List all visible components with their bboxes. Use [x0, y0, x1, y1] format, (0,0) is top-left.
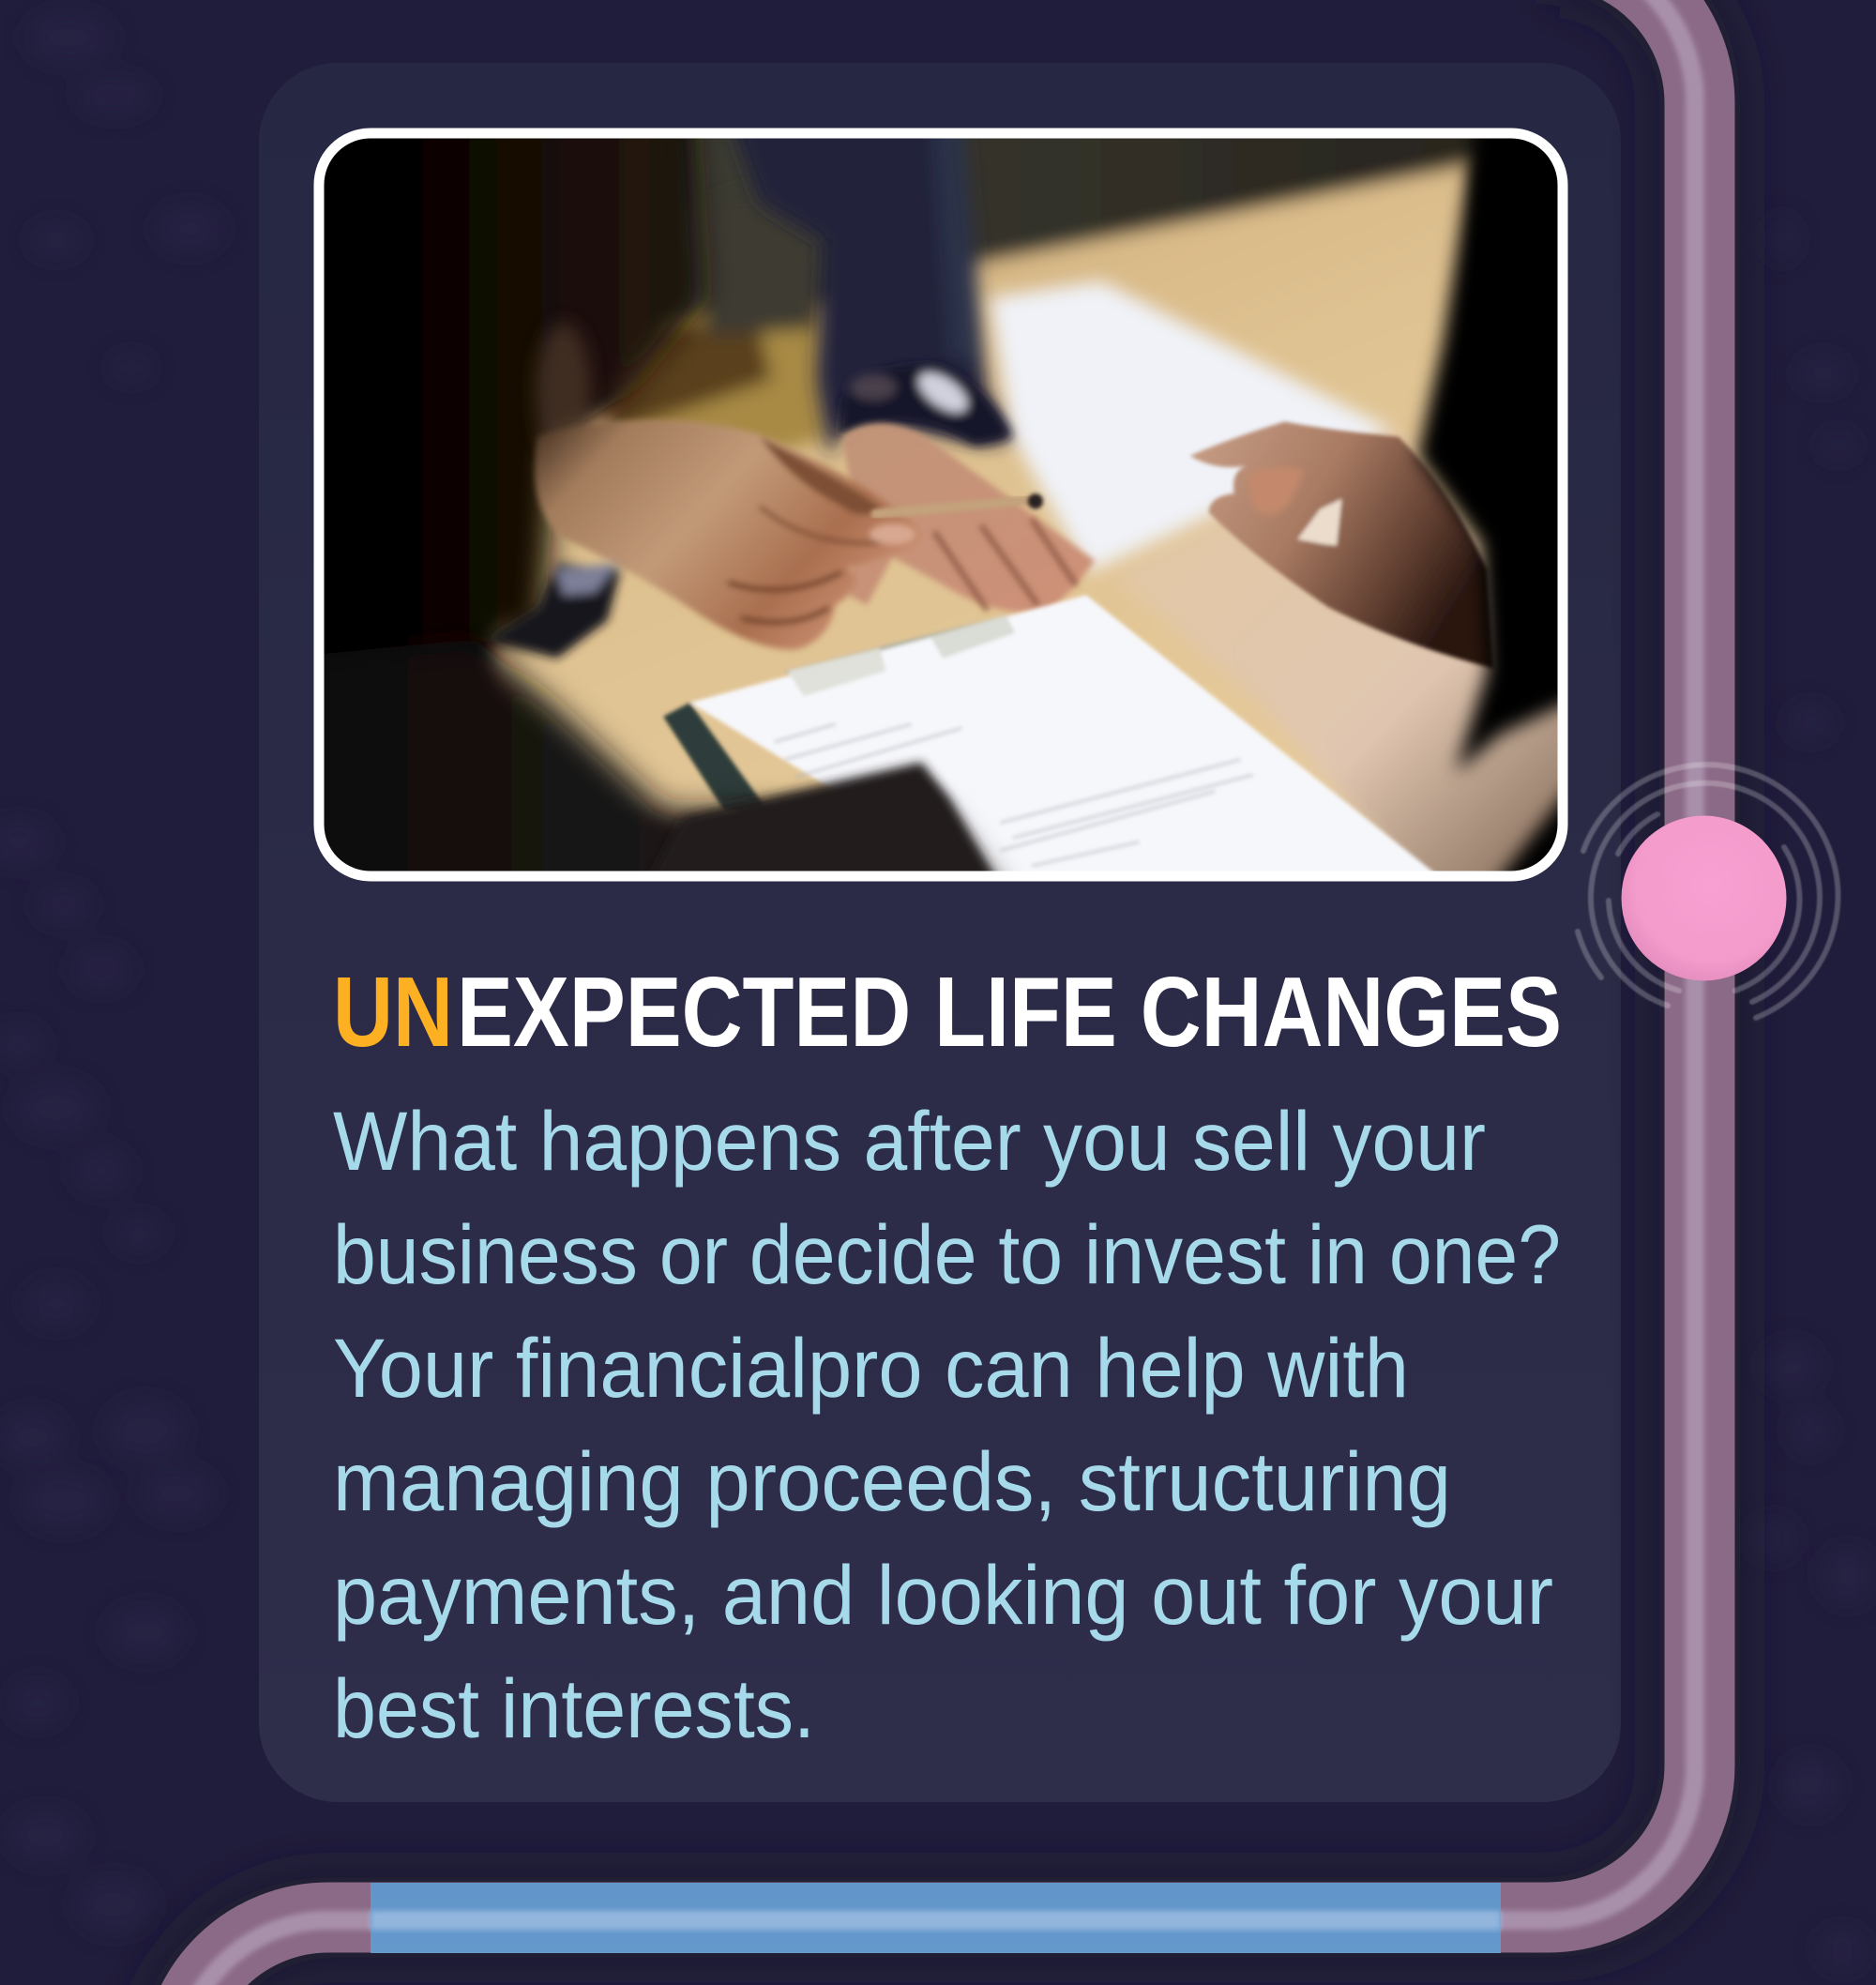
heading: unexpected life changes: EXPECTED LIFE CHANGES — [457, 957, 1562, 1068]
back hand — [841, 424, 1095, 613]
dark shoulder peak — [645, 762, 1000, 886]
sleeve — [728, 114, 1019, 459]
body text: business or decide to invest in one? — [333, 1207, 1561, 1301]
right dark figure — [1417, 114, 1595, 772]
cuff — [488, 564, 620, 659]
heading: unexpected life changes: UN — [333, 957, 453, 1068]
back paper — [990, 281, 1392, 572]
right hand — [1190, 421, 1493, 669]
watch — [838, 364, 1013, 446]
front left hand — [535, 420, 920, 649]
body text: best interests. — [333, 1661, 815, 1755]
photo: hands over documents on a table — [325, 139, 1557, 871]
paper text lines — [775, 724, 1253, 866]
photo frame — [319, 133, 1563, 876]
timeline marker ball — [1621, 816, 1786, 981]
front paper with clipboard — [663, 595, 1443, 880]
panel: content card — [259, 63, 1621, 1802]
body text: managing proceeds, structuring — [333, 1434, 1451, 1528]
timeline marker rings — [1578, 765, 1838, 1018]
head dark blurred — [422, 139, 717, 662]
bottom-right fade — [1493, 772, 1582, 899]
body text — [333, 1094, 1561, 1755]
body text: What happens after you sell your — [333, 1094, 1486, 1188]
pen — [876, 493, 1043, 514]
dark shoulder soft — [279, 639, 1013, 912]
timeline blue segment — [371, 1883, 1501, 1953]
body text: payments, and looking out for your — [333, 1548, 1553, 1642]
wall and table blurred — [481, 114, 1582, 899]
body text: Your financialpro can help with — [333, 1321, 1409, 1415]
